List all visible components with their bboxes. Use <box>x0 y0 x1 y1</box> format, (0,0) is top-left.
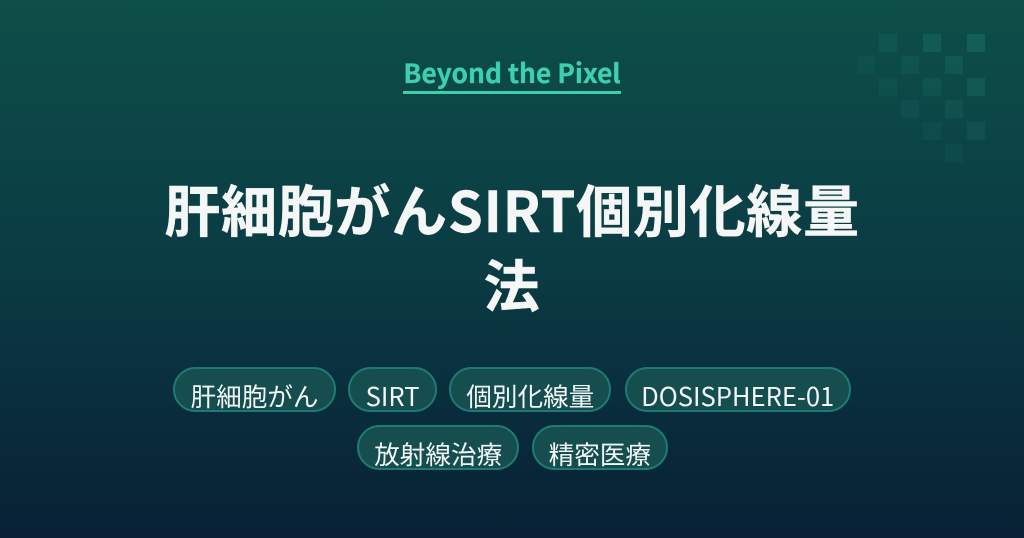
tag: DOSISPHERE-01: DOSISPHERE-01 <box>641 377 834 414</box>
tag: SIRT <box>348 367 437 412</box>
title <box>164 168 860 324</box>
tag: 肝細胞がん <box>173 367 336 412</box>
tag: 個別化線量: 個別化線量 <box>466 377 594 414</box>
decorative pixel grid <box>879 34 985 140</box>
tag: 精密医療: 精密医療 <box>549 435 651 472</box>
title: 法 <box>484 243 540 324</box>
tag list <box>173 367 851 472</box>
tag: 精密医療 <box>532 425 668 470</box>
tag: 放射線治療 <box>357 425 519 470</box>
tag: 放射線治療: 放射線治療 <box>374 435 502 472</box>
tag: 肝細胞がん: 肝細胞がん <box>190 377 318 414</box>
tag: DOSISPHERE-01 <box>625 367 851 412</box>
brand underline <box>403 91 621 94</box>
title: 肝細胞がんSIRT個別化線量 <box>164 168 860 249</box>
tag: 個別化線量 <box>449 367 611 412</box>
tag: SIRT: SIRT <box>366 377 420 414</box>
brand heading: Beyond the Pixel <box>403 52 621 91</box>
